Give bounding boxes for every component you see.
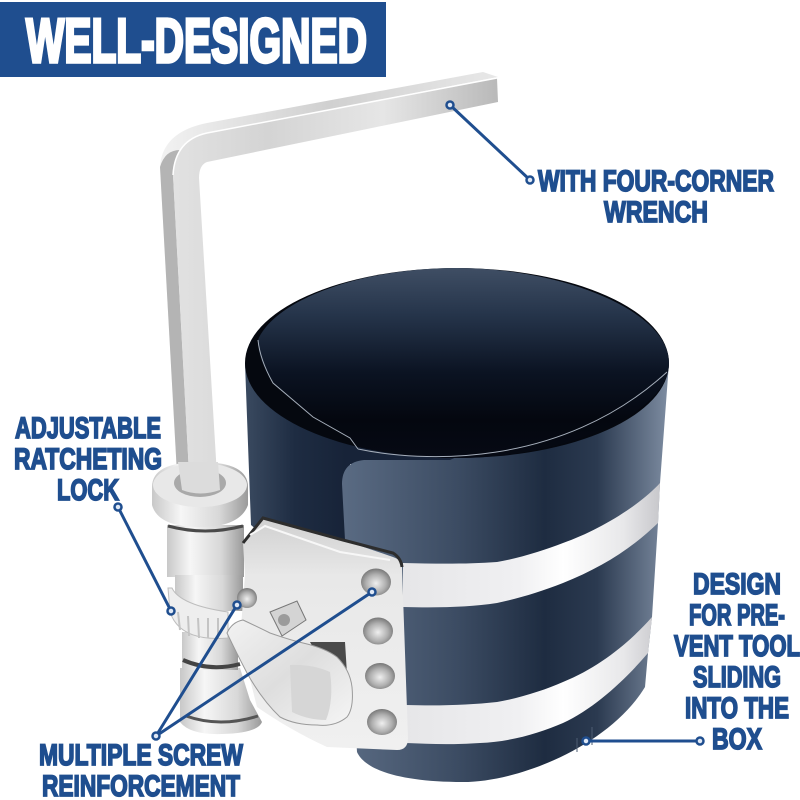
lower steel band [406, 617, 652, 744]
ratchet gear [168, 588, 228, 638]
callout: prevent sliding [582, 568, 800, 756]
piston ring compressor body [245, 268, 669, 782]
title banner [0, 2, 386, 77]
overlapping band panel [342, 363, 669, 782]
callout: ratcheting lock [14, 412, 174, 614]
callout: screw reinforcement [39, 588, 376, 800]
clamp plate [227, 518, 408, 750]
seam ticks [577, 727, 592, 752]
lever handle [227, 620, 352, 725]
rim highlight [258, 340, 667, 457]
lower flange [180, 668, 262, 734]
callout: wrench [446, 102, 774, 229]
square wrench [160, 72, 498, 492]
upper steel band [403, 483, 660, 607]
rivets [361, 568, 391, 596]
callout: ratcheting lock: LOCK [57, 474, 119, 507]
title banner: WELL-DESIGNED [26, 7, 367, 76]
ratchet lock assembly [152, 462, 262, 734]
top collar [152, 462, 248, 527]
callout: ratcheting lock: ADJUSTABLE [15, 412, 161, 445]
small screw [237, 588, 257, 608]
callout: wrench: WRENCH [604, 196, 708, 229]
callout: prevent sliding: BOX [712, 723, 762, 756]
top opening [245, 268, 669, 458]
upper cylinder [167, 525, 244, 577]
callout: ratcheting lock: RATCHETING [14, 443, 162, 476]
middle cylinder [182, 632, 238, 670]
callout: screw reinforcement: MULTIPLE SCREW [39, 739, 244, 772]
lever shadow [310, 642, 348, 690]
